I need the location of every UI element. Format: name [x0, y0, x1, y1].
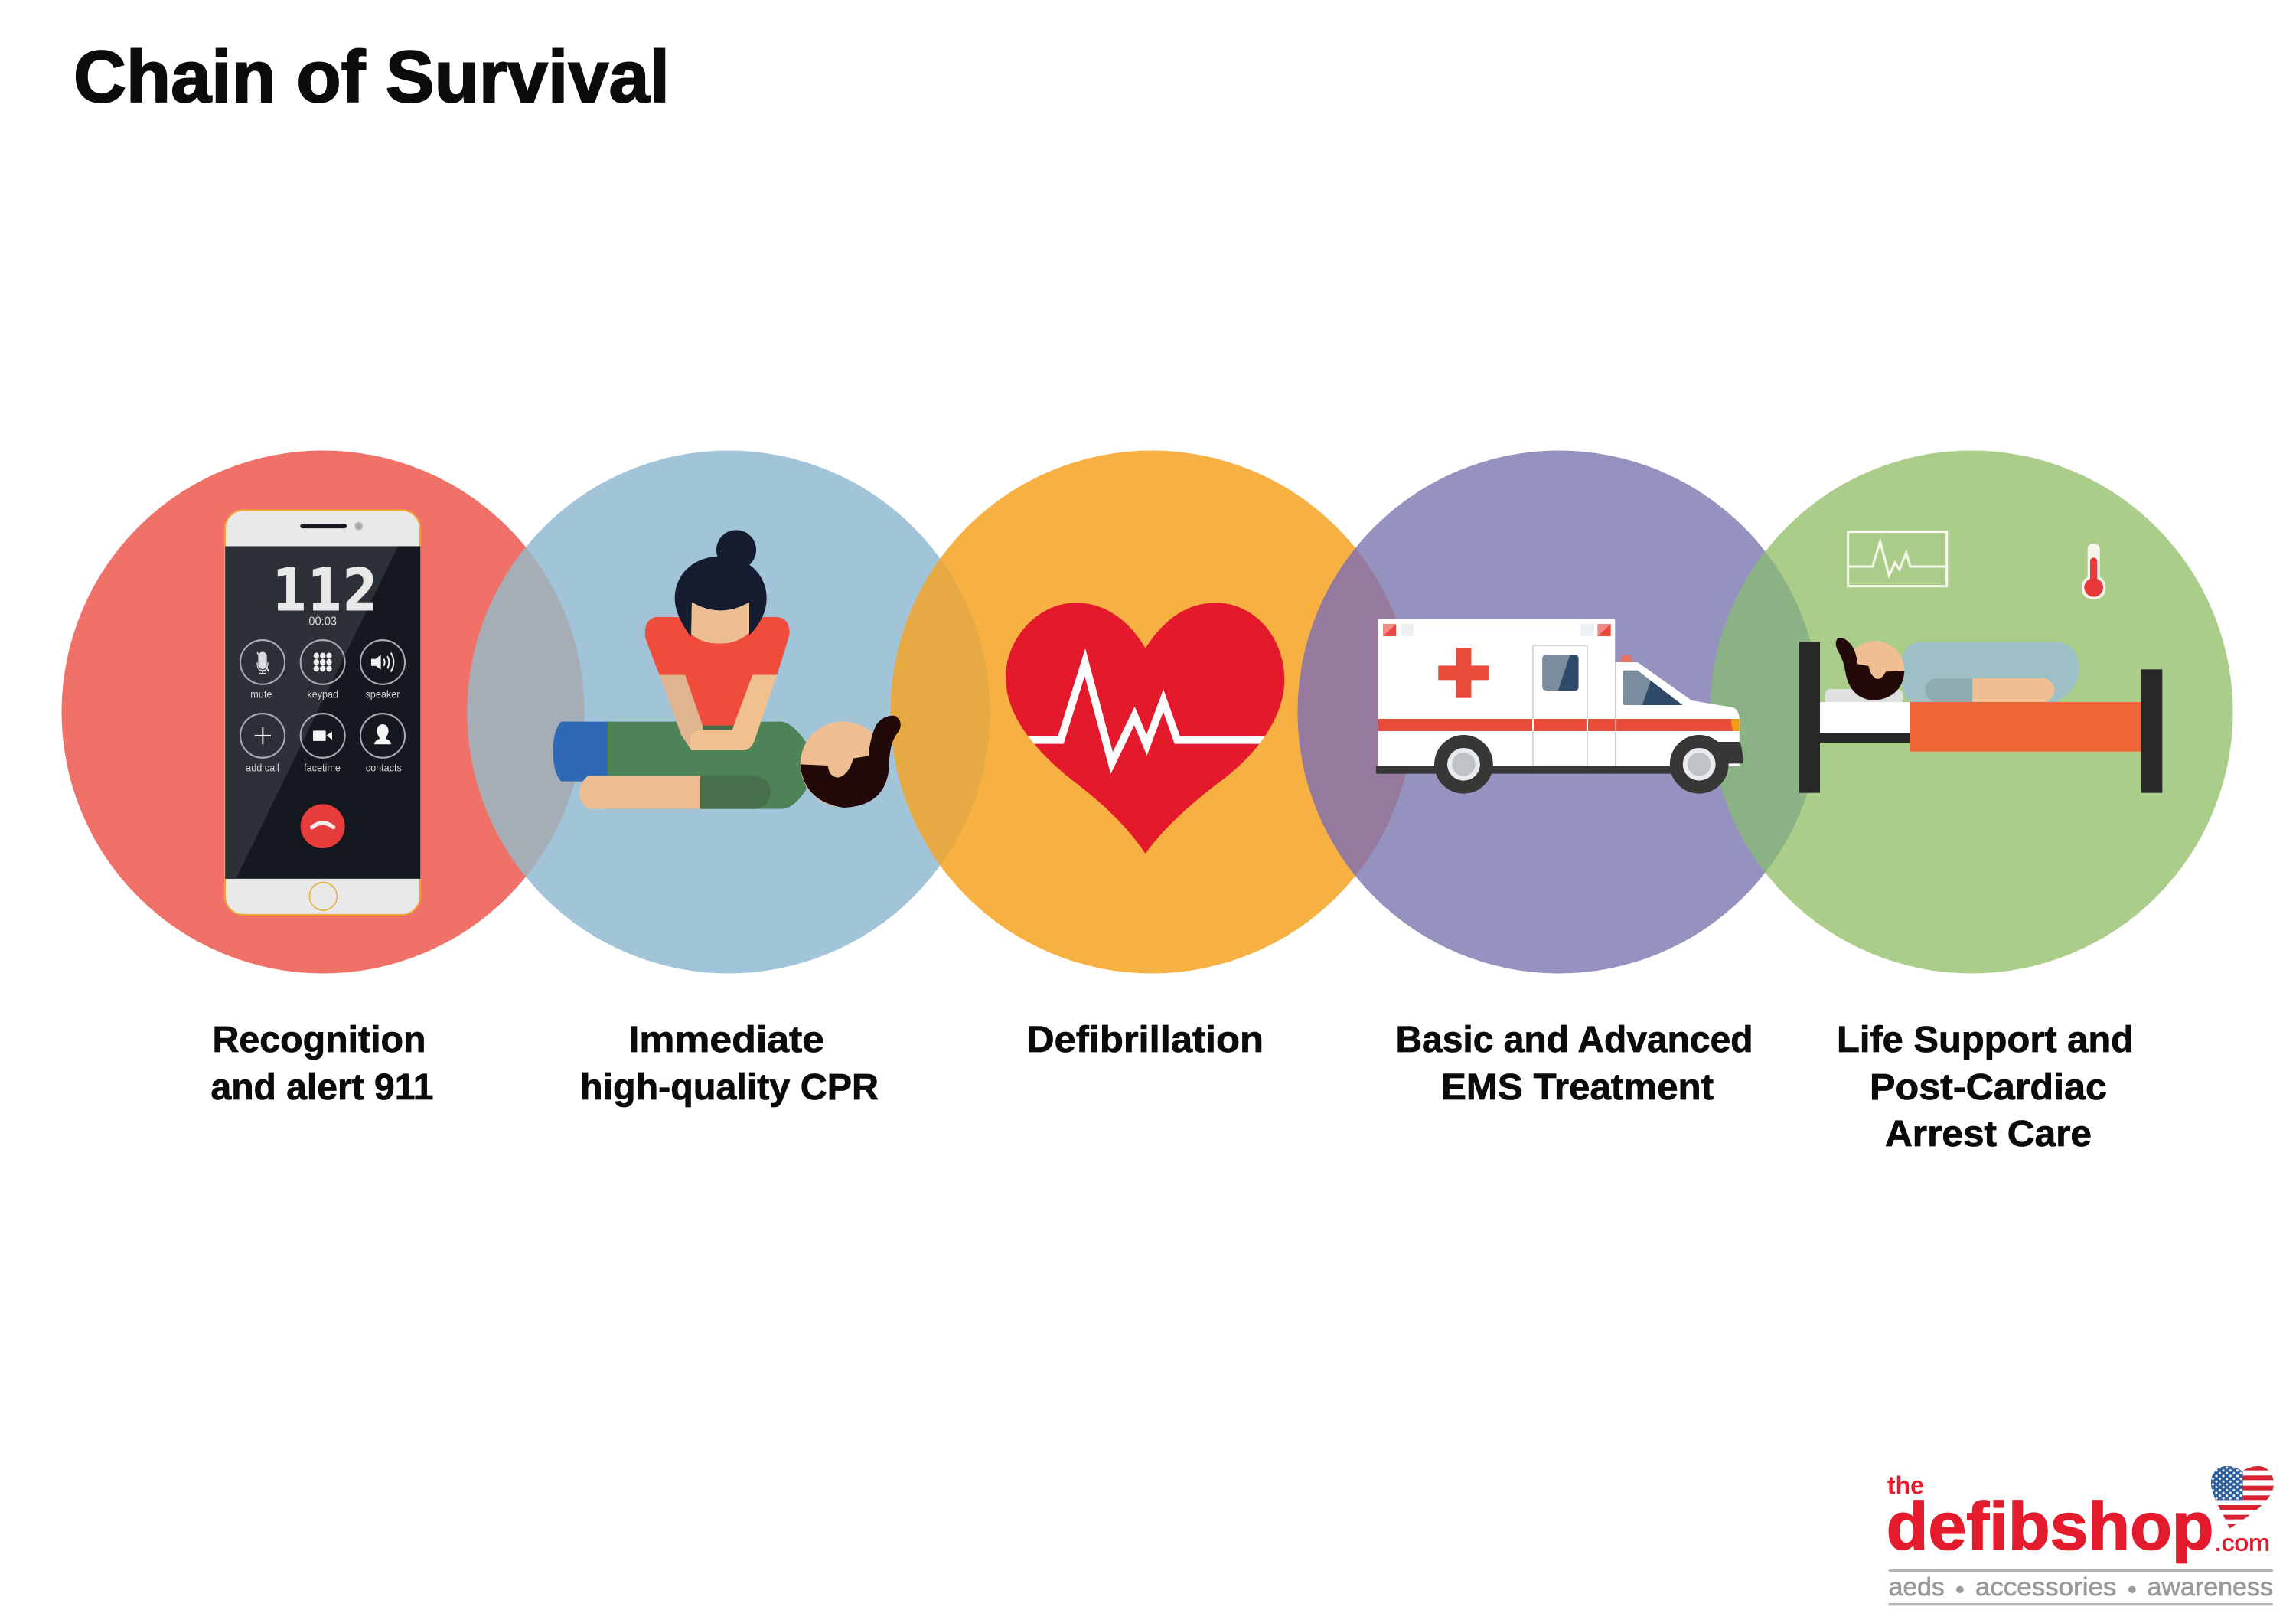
button labels — [246, 688, 402, 774]
caption: step 4 — [1396, 1020, 1753, 1108]
ECG line — [1020, 662, 1276, 763]
door window — [1542, 655, 1579, 691]
pillow — [1825, 689, 1903, 704]
overlap: blue and orange — [891, 559, 990, 865]
thermometer — [2082, 544, 2105, 599]
caption: step 5 — [1837, 1020, 2134, 1154]
icon: smartphone dialing 112 — [225, 510, 420, 915]
rescuer right arm and hands — [690, 675, 777, 750]
logo word: the: the — [1887, 1471, 1924, 1500]
rescuer left arm — [660, 675, 704, 750]
button labels: facetime — [304, 762, 341, 774]
call buttons — [240, 640, 405, 758]
call timer: 00:03 — [308, 615, 337, 629]
icon: heart with ECG line — [1006, 603, 1284, 854]
blanket — [1910, 702, 2141, 752]
cab window — [1623, 671, 1682, 705]
caption: step 3: Defibrillation — [1026, 1020, 1264, 1060]
patient head — [801, 721, 886, 807]
overlap: orange and purple — [1298, 548, 1406, 876]
button labels: contacts — [366, 762, 402, 774]
red cross — [1438, 648, 1489, 698]
logo tagline — [1889, 1573, 2273, 1602]
caption: step 5: Post-Cardiac — [1870, 1067, 2107, 1108]
phone body — [225, 510, 420, 915]
logo flag heart — [2211, 1466, 2275, 1529]
bed headboard — [1799, 642, 1820, 793]
icon: hang-up handset — [312, 823, 334, 828]
chest shadow — [703, 726, 733, 730]
logo tagline: aeds — [1889, 1573, 1945, 1602]
dialed number: 112 — [272, 556, 377, 625]
cab divider — [1614, 662, 1618, 766]
patient torso — [608, 722, 806, 809]
stripe — [1378, 719, 1733, 731]
icon: ambulance — [1376, 619, 1743, 794]
title: Chain of Survival — [73, 36, 670, 118]
caption: step 4: Basic and Advanced — [1396, 1020, 1753, 1060]
phone screen — [225, 546, 420, 879]
heart — [1006, 603, 1284, 854]
caption: step 5: Life Support and — [1837, 1020, 2134, 1060]
patient arm — [579, 776, 700, 809]
circle: defibrillation (orange) — [891, 450, 1413, 974]
logo word: defibshop: defibshop — [1887, 1490, 2213, 1564]
icon: mute microphone — [257, 651, 269, 674]
circle: CPR (blue) — [467, 450, 990, 974]
patient legs — [553, 722, 608, 782]
circle: recognition (red) — [61, 450, 585, 974]
circle: post-cardiac care (green) — [1710, 450, 2233, 974]
bed footboard — [2141, 669, 2162, 793]
overlap: red and blue — [467, 547, 585, 877]
rescuer hair bun — [716, 530, 756, 570]
caption: step 2: high-quality CPR — [580, 1067, 879, 1108]
beacon — [1620, 655, 1632, 662]
marker lights — [1383, 624, 1611, 636]
rear door — [1533, 645, 1587, 766]
patient head — [1846, 641, 1904, 700]
patient hair and beard — [1836, 638, 1904, 700]
headlight — [1731, 719, 1740, 731]
icon: speaker — [371, 653, 393, 671]
caption: step 2: Immediate — [628, 1020, 824, 1060]
patient arm — [1972, 678, 2055, 702]
chain of five overlapping circles — [61, 450, 2233, 974]
door stripe breaks — [1533, 719, 1587, 731]
overlap: purple and green — [1710, 551, 1820, 873]
mattress — [1820, 702, 1911, 733]
front bumper — [1717, 742, 1743, 763]
home button — [309, 883, 337, 910]
camera — [355, 522, 362, 530]
caption: step 1: Recognition — [213, 1020, 426, 1060]
vital signs monitor — [1848, 532, 1947, 586]
icon: patient in hospital bed — [1799, 532, 2162, 793]
chassis — [1376, 766, 1675, 774]
circle: EMS (purple) — [1298, 450, 1820, 974]
button labels: keypad — [307, 688, 338, 700]
ambulance cab — [1616, 662, 1740, 766]
button labels: speaker — [365, 688, 400, 700]
patient torso — [1900, 642, 2079, 702]
logo tagline: accessories — [1975, 1573, 2116, 1602]
icon: person giving CPR — [553, 530, 901, 809]
logo rule top — [1889, 1569, 2273, 1572]
button labels: mute — [250, 688, 272, 700]
front wheel — [1670, 735, 1729, 794]
patient sleeve — [700, 776, 771, 809]
earpiece speaker — [300, 524, 347, 528]
patient sleeve — [1925, 678, 1972, 702]
rescuer hair — [675, 557, 767, 637]
caption: step 2 — [580, 1020, 879, 1108]
logo rule bottom — [1889, 1603, 2273, 1605]
ambulance box — [1378, 619, 1615, 766]
rescuer face — [691, 603, 749, 644]
rescuer shirt — [645, 617, 790, 726]
logo: the defibshop — [1887, 1466, 2275, 1605]
icon: facetime camera — [313, 730, 332, 741]
icon: contacts — [374, 724, 391, 744]
caption: step 1 — [211, 1020, 433, 1108]
icon: keypad — [314, 653, 332, 671]
caption: step 5: Arrest Care — [1885, 1114, 2092, 1154]
caption: step 4: EMS Treatment — [1441, 1067, 1714, 1108]
logo word: .com: .com — [2215, 1529, 2270, 1556]
bed rail — [1820, 733, 1911, 743]
logo tagline: awareness — [2148, 1573, 2273, 1602]
screen glare — [225, 546, 398, 879]
button labels: add call — [246, 762, 279, 774]
rear wheel — [1434, 735, 1493, 794]
icon: add call — [255, 727, 271, 744]
end call button — [301, 804, 345, 848]
patient hair and beard — [801, 716, 901, 808]
caption: step 1: and alert 911 — [211, 1067, 433, 1108]
